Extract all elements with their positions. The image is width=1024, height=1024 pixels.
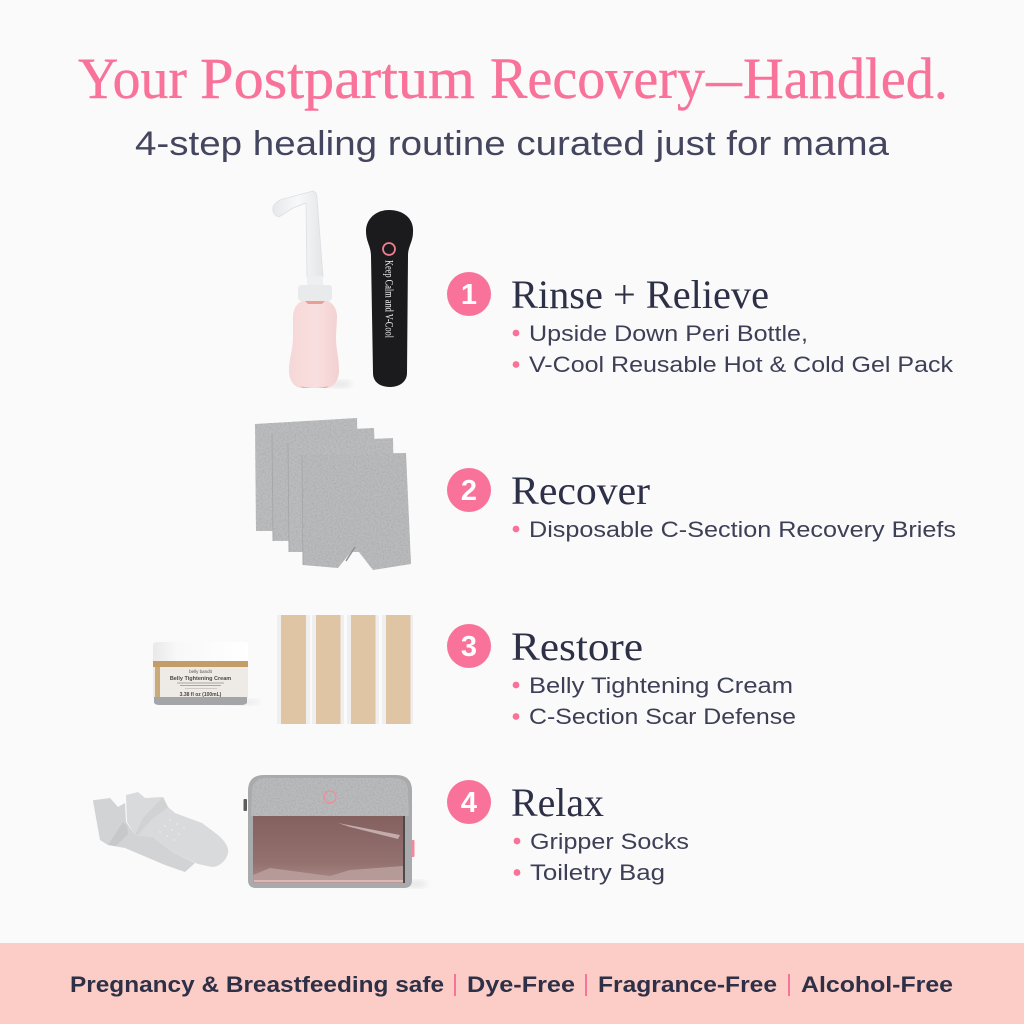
title: Your (78, 46, 187, 111)
pink tag (411, 840, 414, 857)
step 3 badge: 3 (461, 631, 477, 663)
title: Handled. (743, 46, 948, 111)
step 2 list: Disposable C-Section Recovery Briefs (529, 517, 956, 542)
step 1 list (513, 321, 954, 377)
step 4 badge: 4 (461, 787, 477, 819)
icon: toiletry bag (244, 775, 427, 888)
jar label text: belly bandit (189, 669, 213, 674)
step 4 list: Gripper Socks (530, 829, 689, 854)
footer claims: Alcohol-Free (801, 972, 953, 997)
step 3 list (513, 673, 796, 729)
step 4 heading: Relax (511, 780, 604, 825)
icon: gel pack (366, 210, 413, 387)
footer band (0, 943, 1024, 1024)
step 1 list: Upside Down Peri Bottle, (529, 321, 808, 346)
step 2 heading: Recover (511, 468, 650, 513)
jar label text (170, 669, 231, 698)
step 1 list: V-Cool Reusable Hot & Cold Gel Pack (529, 352, 954, 377)
step 1 badge: 1 (461, 279, 477, 311)
title (78, 46, 948, 111)
step 2 badge: 2 (461, 475, 477, 507)
step 3 heading: Restore (511, 624, 643, 669)
step 3 list: Belly Tightening Cream (529, 673, 793, 698)
step 3 badge (447, 624, 491, 668)
footer claims: Fragrance-Free (598, 972, 777, 997)
zipper pull (244, 799, 247, 811)
footer claims (70, 972, 953, 997)
pack label: Keep Calm and V-Cool (382, 260, 394, 338)
clear window (253, 816, 403, 883)
subtitle: 4-step healing routine curated just for mama (135, 125, 889, 163)
step 2 badge (447, 468, 491, 512)
title: — (705, 46, 743, 111)
title: Postpartum (200, 46, 475, 111)
jar label text: 3.38 fl oz (100mL) (180, 692, 222, 698)
footer claims: Pregnancy & Breastfeeding safe (70, 972, 444, 997)
title: Recovery (490, 46, 705, 111)
step 3 list: C-Section Scar Defense (529, 704, 796, 729)
step 4 badge (447, 780, 491, 824)
icon: belly tightening cream jar (153, 642, 260, 705)
step 4 list (514, 829, 689, 885)
step 4 list: Toiletry Bag (530, 860, 665, 885)
icon: scar defense strips (277, 615, 413, 724)
icon: peri bottle (273, 191, 352, 388)
step 1 heading: Rinse + Relieve (511, 272, 769, 317)
footer claims: Dye-Free (467, 972, 575, 997)
jar label text: Belly Tightening Cream (170, 676, 231, 682)
ring logo (324, 791, 336, 803)
icon: gripper socks (93, 792, 228, 872)
ring logo (383, 243, 395, 255)
step 1 badge (447, 272, 491, 316)
icon: recovery briefs (255, 418, 411, 570)
